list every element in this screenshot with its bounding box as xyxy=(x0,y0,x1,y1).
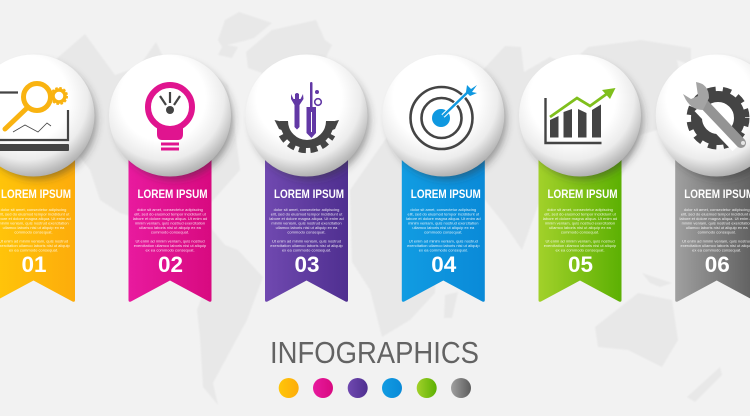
body copy 02: ex ea commodo consequat. xyxy=(145,248,195,252)
text block 05 xyxy=(543,189,618,277)
text block 02 xyxy=(133,189,208,277)
body copy 04: minim veniam, quis nostrud exercitation xyxy=(408,220,478,226)
body copy 03: Ut enim ad minim veniam, quis nostrud xyxy=(272,238,341,244)
body copy 01: ullamco laboris nisi ut aliquip ex ea xyxy=(3,225,65,230)
title: INFOGRAPHICS xyxy=(270,335,479,370)
body copy 03: elit, sed do eiusmod tempor incididunt ut xyxy=(271,212,343,216)
panel: step 01 xyxy=(0,54,96,302)
panel: step 06 xyxy=(656,54,750,302)
number 05: 05 xyxy=(568,252,593,277)
body copy 06: Ut enim ad minim veniam, quis nostrud xyxy=(682,238,750,244)
body copy 01: commodo consequat. xyxy=(14,230,53,234)
ribbon 06 xyxy=(675,160,750,302)
number 03: 03 xyxy=(294,252,320,277)
ribbon 01 xyxy=(0,160,75,302)
body copy 06: dolor sit amet, consectetur adipiscing xyxy=(684,207,750,212)
body copy 01: ex ea commodo consequat. xyxy=(9,248,58,252)
body copy 02: Ut enim ad minim veniam, quis nostrud xyxy=(135,238,205,244)
body copy 04: dolor sit amet, consectetur adipiscing xyxy=(410,207,476,212)
sphere 02 xyxy=(109,54,233,180)
heading 02: LOREM IPSUM xyxy=(138,189,208,201)
sphere 01 xyxy=(0,54,96,180)
body copy 05: Ut enim ad minim veniam, quis nostrud xyxy=(545,238,615,244)
legend dots xyxy=(279,378,471,398)
body copy 02: elit, sed do eiusmod tempor incididunt ut xyxy=(134,212,207,216)
body copy 05: labore et dolore magna aliqua. Ut enim ad xyxy=(543,216,617,221)
body copy 06: ex ea commodo consequat. xyxy=(692,248,741,252)
body copy 02: minim veniam, quis nostrud exercitation xyxy=(135,220,205,226)
panel: step 02 xyxy=(109,54,233,302)
body copy 03: labore et dolore magna aliqua. Ut enim ad xyxy=(269,216,344,221)
heading 04: LOREM IPSUM xyxy=(411,189,481,201)
body copy 04: exercitation ullamco laboris nisi ut aliquip xyxy=(407,243,480,248)
panel: step 04 xyxy=(382,54,506,302)
body copy 01: minim veniam, quis nostrud exercitation xyxy=(0,220,69,226)
panel: step 03 xyxy=(246,54,370,302)
number 04: 04 xyxy=(431,252,457,277)
body copy 02: commodo consequat. xyxy=(151,230,189,234)
body copy 05: dolor sit amet, consectetur adipiscing xyxy=(547,207,613,212)
ribbon 04 xyxy=(402,160,485,302)
text block 01 xyxy=(0,189,71,277)
body copy 03: dolor sit amet, consectetur adipiscing xyxy=(274,207,339,212)
ribbon 05 xyxy=(538,160,622,302)
sphere 06 xyxy=(656,54,750,180)
number 06: 06 xyxy=(705,252,730,277)
body copy 01: Ut enim ad minim veniam, quis nostrud xyxy=(0,238,68,244)
body copy 04: elit, sed do eiusmod tempor incididunt ut xyxy=(407,212,480,216)
body copy 04: labore et dolore magna aliqua. Ut enim ad xyxy=(406,216,481,221)
icon: magnifier over monitor chart xyxy=(0,84,69,151)
sphere 05 xyxy=(519,54,643,180)
body copy 02: exercitation ullamco laboris nisi ut aliquip xyxy=(134,243,207,248)
number 02: 02 xyxy=(158,252,183,277)
icon: tools and half gear xyxy=(274,82,339,150)
body copy 04: ex ea commodo consequat. xyxy=(419,248,468,252)
body copy 03: commodo consequat. xyxy=(287,230,326,234)
heading 03: LOREM IPSUM xyxy=(274,189,344,201)
text block 04 xyxy=(406,189,481,277)
panel: step 05 xyxy=(519,54,643,302)
ribbon 02 xyxy=(128,160,212,302)
body copy 03: ex ea commodo consequat. xyxy=(282,248,331,252)
sphere 03 xyxy=(246,54,370,180)
text block 06 xyxy=(679,189,750,277)
body copy 05: ullamco laboris nisi ut aliquip ex ea xyxy=(549,225,612,230)
body copy 05: minim veniam, quis nostrud exercitation xyxy=(545,220,615,226)
body copy 02: dolor sit amet, consectetur adipiscing xyxy=(137,207,203,212)
body copy 02: labore et dolore magna aliqua. Ut enim ad xyxy=(133,216,207,221)
number 01: 01 xyxy=(21,252,47,277)
body copy 05: exercitation ullamco laboris nisi ut aliquip xyxy=(544,243,617,248)
text block 03 xyxy=(269,189,344,277)
sphere 04 xyxy=(382,54,506,180)
ribbon 03 xyxy=(265,160,348,302)
icon: light bulb xyxy=(148,85,192,150)
body copy 04: ullamco laboris nisi ut aliquip ex ea xyxy=(412,225,475,230)
body copy 06: minim veniam, quis nostrud exercitation xyxy=(682,220,750,226)
body copy 01: dolor sit amet, consectetur adipiscing xyxy=(1,207,66,212)
body copy 02: ullamco laboris nisi ut aliquip ex ea xyxy=(139,225,202,230)
body copy 05: elit, sed do eiusmod tempor incididunt ut xyxy=(544,212,617,216)
body copy 03: exercitation ullamco laboris nisi ut aliquip xyxy=(270,243,344,248)
heading 05: LOREM IPSUM xyxy=(548,189,618,201)
body copy 05: commodo consequat. xyxy=(561,230,599,234)
heading 01: LOREM IPSUM xyxy=(1,189,71,201)
body copy 06: commodo consequat. xyxy=(698,230,736,234)
icon: wrench and gear xyxy=(683,82,747,147)
body copy 05: ex ea commodo consequat. xyxy=(555,248,605,252)
icon: target with arrow xyxy=(410,85,477,149)
icon: rising bar chart xyxy=(546,88,616,143)
body copy 04: commodo consequat. xyxy=(424,230,462,234)
body copy 03: ullamco laboris nisi ut aliquip ex ea xyxy=(276,225,338,230)
body copy 04: Ut enim ad minim veniam, quis nostrud xyxy=(409,238,478,244)
body copy 03: minim veniam, quis nostrud exercitation xyxy=(271,220,342,226)
body copy 06: ullamco laboris nisi ut aliquip ex ea xyxy=(686,225,748,230)
